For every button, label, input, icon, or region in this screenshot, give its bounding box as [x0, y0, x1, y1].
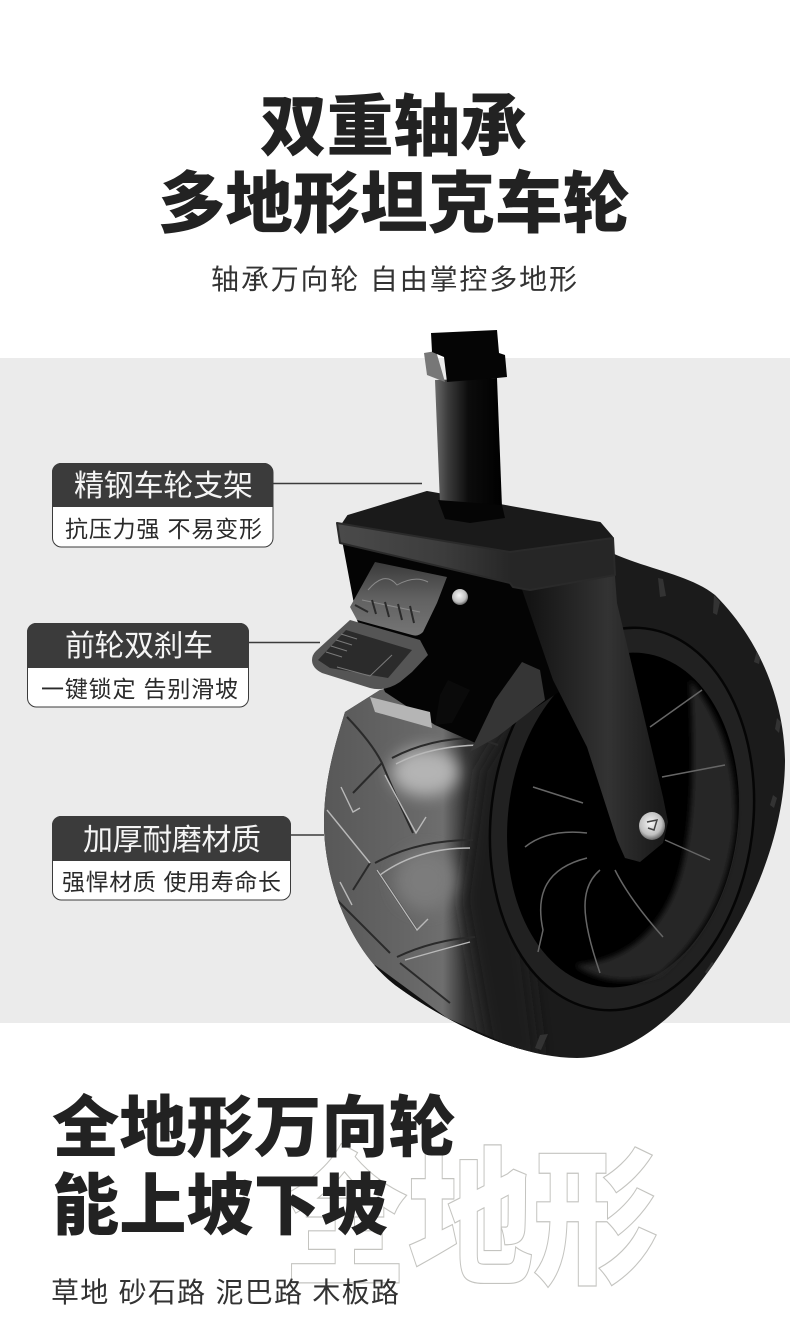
title: 双重轴承 — [260, 90, 527, 165]
bottom heading: 全地形万向轮 — [52, 1091, 456, 1166]
tread lugs on right edge — [535, 578, 781, 1050]
bottom heading — [52, 1091, 456, 1244]
title — [158, 90, 630, 242]
product photo: caster wheel — [312, 330, 785, 1065]
callout: thick material: 强悍材质 使用寿命长 — [62, 869, 281, 895]
stem cap — [424, 330, 507, 382]
fender body above the tire — [370, 662, 545, 752]
axle screw — [639, 812, 665, 840]
lower brake pedal — [312, 620, 428, 689]
wheel tire — [320, 553, 785, 1065]
wheel rim ring — [469, 612, 775, 1026]
outlined watermark text: 全地形 — [282, 1138, 659, 1304]
callout: front brake — [27, 623, 249, 707]
callout: steel bracket: 精钢车轮支架 — [74, 470, 253, 503]
callout: steel bracket — [52, 463, 273, 547]
panel: gray product band — [0, 358, 790, 1023]
stem — [435, 378, 502, 507]
callout: thick material — [52, 816, 291, 900]
tread grooves — [335, 717, 498, 1003]
bracket top plate — [342, 492, 612, 552]
wheel hub opening — [488, 639, 758, 1001]
upper brake pedal — [350, 562, 447, 636]
callout: thick material: 加厚耐磨材质 — [83, 824, 261, 857]
terrain list: 草地 砂石路 泥巴路 木板路 — [51, 1277, 399, 1308]
callout: steel bracket: 抗压力强 不易变形 — [65, 516, 262, 542]
brake mechanism — [342, 540, 562, 745]
hub spokes — [525, 690, 725, 973]
callout leader lines — [249, 484, 422, 835]
bracket front face — [337, 523, 615, 590]
title: 多地形坦克车轮 — [158, 167, 630, 242]
pivot bolt — [452, 589, 468, 605]
callout: front brake: 一键锁定 告别滑坡 — [41, 676, 238, 702]
subtitle: 轴承万向轮 自由掌控多地形 — [211, 264, 577, 295]
fork arm — [513, 537, 668, 862]
hub inner shading — [575, 680, 735, 981]
callout: front brake: 前轮双刹车 — [65, 630, 213, 663]
bottom heading: 能上坡下坡 — [52, 1169, 388, 1244]
